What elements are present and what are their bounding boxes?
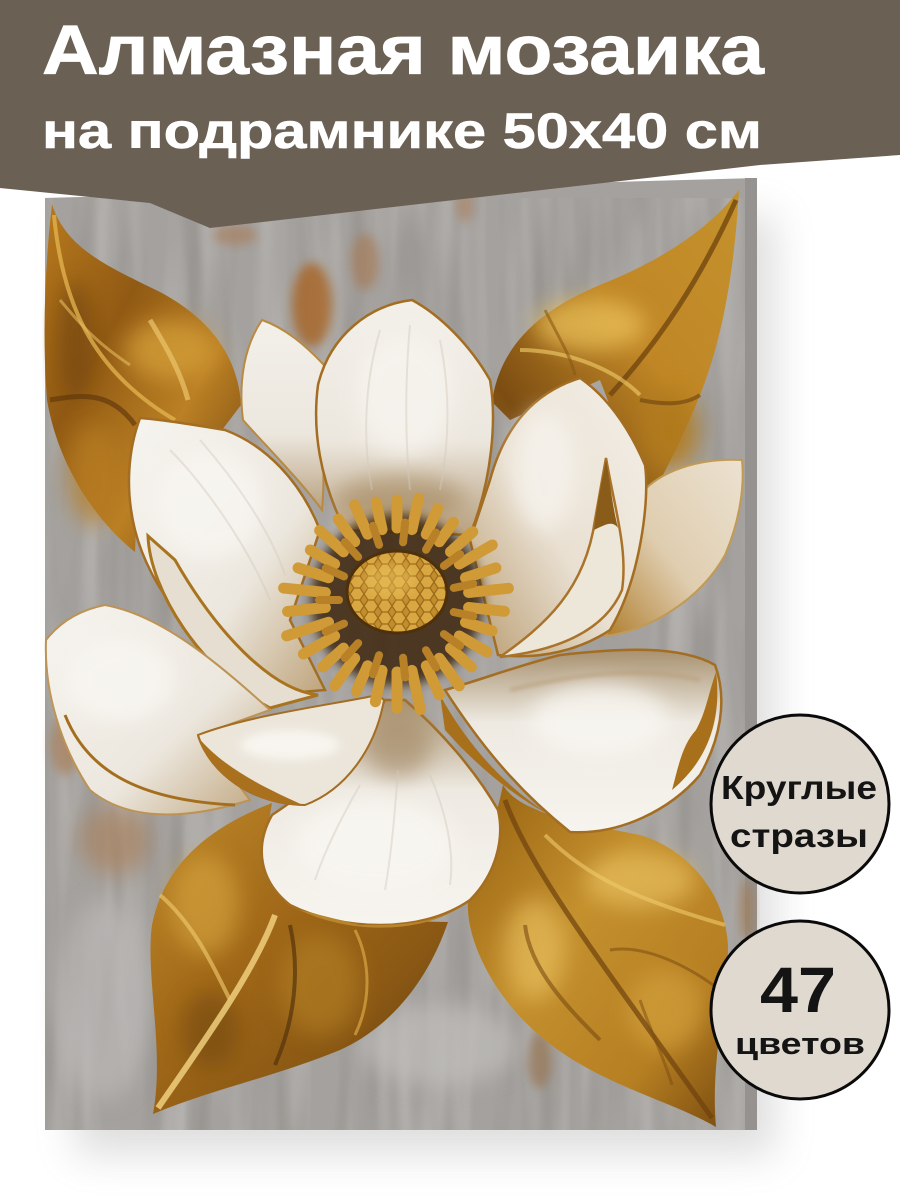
canvas drop shadow — [75, 215, 775, 1155]
flower centre: golden core — [347, 551, 447, 633]
badge: 47 colours: 47 — [760, 954, 836, 1026]
petal: right back cream — [606, 460, 743, 636]
leaf: top right — [492, 190, 739, 505]
leaf: bottom left — [150, 803, 448, 1114]
header band — [0, 0, 900, 228]
subtitle: на подрамнике 50х40 см — [42, 103, 762, 159]
badge: round rhinestones: Круглые — [721, 769, 877, 806]
petal: lower small fold — [197, 695, 384, 806]
painting: grey textured background — [45, 178, 757, 1130]
badge: 47 colours: цветов — [735, 1026, 865, 1061]
petal: upper left small — [241, 320, 324, 510]
leaf: bottom right — [468, 785, 728, 1127]
title: Алмазная мозаика — [42, 11, 765, 89]
flower centre: stamens — [284, 498, 508, 710]
petal: lower left — [46, 605, 270, 814]
badge: round rhinestones — [711, 715, 889, 893]
petal: bottom centre — [262, 700, 500, 928]
leaf: top left — [45, 204, 241, 552]
petal: large left — [129, 418, 325, 708]
badge: 47 colours — [711, 921, 889, 1099]
petal: lower right — [440, 650, 721, 832]
badge: round rhinestones: стразы — [730, 817, 868, 854]
petal: upper right — [470, 378, 646, 657]
petal: top centre — [316, 300, 493, 535]
